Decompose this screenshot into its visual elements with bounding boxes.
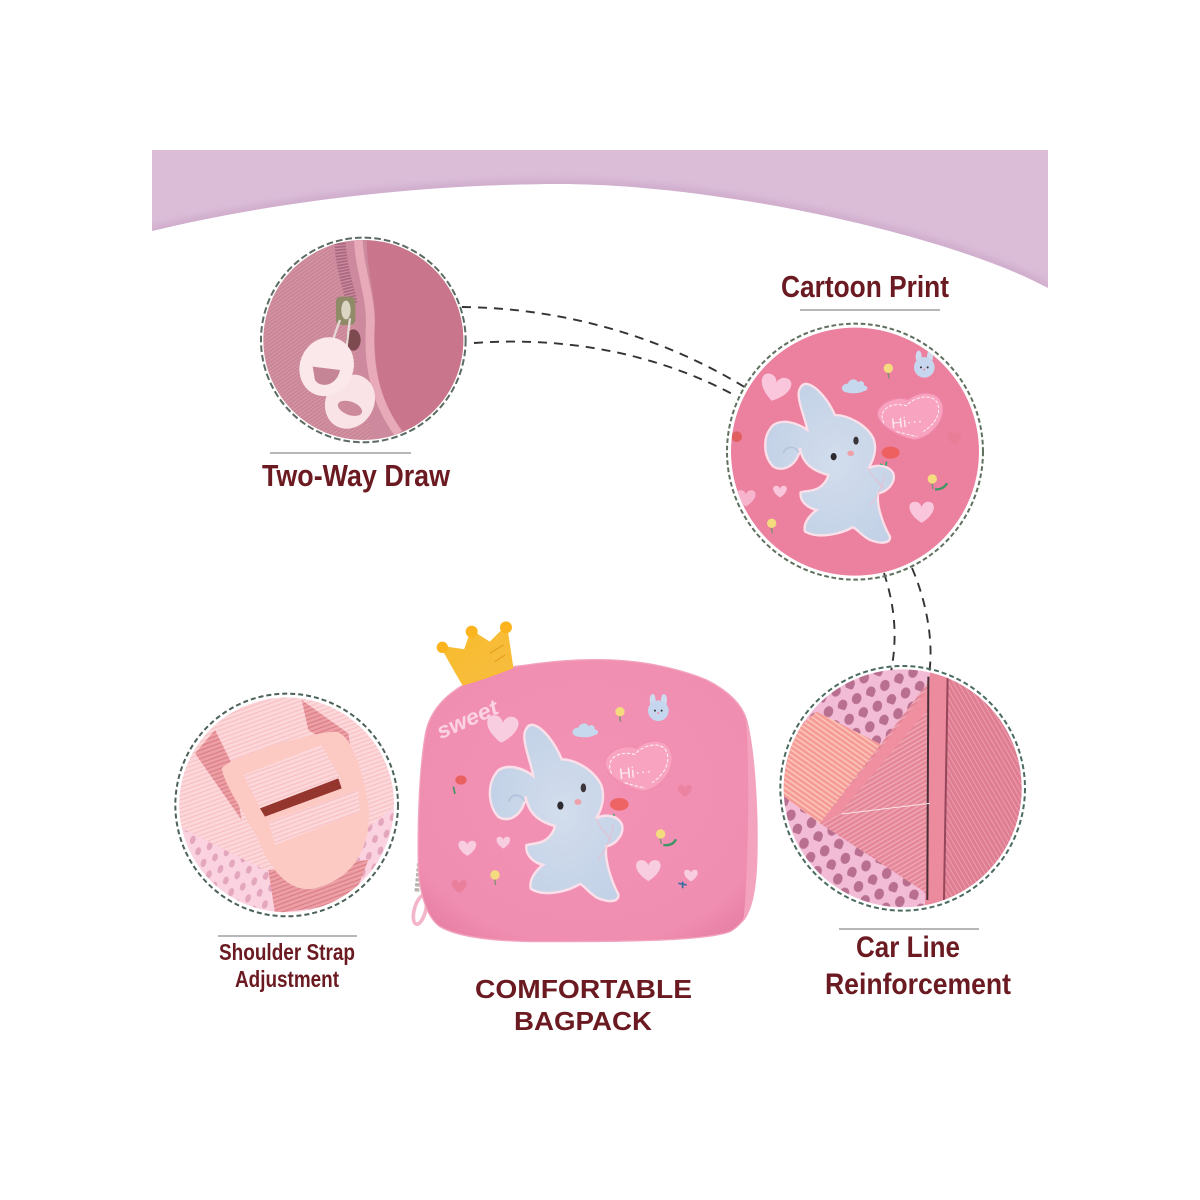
rule above shoulder strap (218, 935, 357, 937)
label: cartoon print: Cartoon Print (781, 269, 949, 304)
top lavender curved band (152, 150, 1048, 290)
rule above car line (839, 928, 979, 930)
detail circle: shoulder strap adjuster (175, 693, 402, 917)
hi heart: Hi··· (618, 763, 652, 783)
bag decorations (452, 694, 698, 893)
label: car line reinforcement: Reinforcement (825, 968, 1011, 1001)
dashed connector: cartoon print to car line (884, 568, 931, 674)
detail circle: car line reinforcement (780, 666, 1028, 913)
bag side panel (743, 718, 757, 922)
label: shoulder strap adjustment: Adjustment (235, 966, 339, 992)
bunny figure (490, 725, 622, 901)
rule above two-way draw (270, 452, 411, 454)
heading: comfortable bagpack (475, 974, 692, 1036)
label: car line reinforcement (825, 931, 1011, 1001)
product: pink bag (411, 621, 757, 942)
detail circle: cartoon print (727, 324, 983, 580)
dashed connector: zipper to cartoon print (462, 307, 746, 396)
label: shoulder strap adjustment: Shoulder Strap (219, 939, 355, 965)
bag body (418, 660, 757, 942)
heading: comfortable bagpack: COMFORTABLE (475, 974, 692, 1004)
sweet text: sweet (433, 694, 504, 744)
label: shoulder strap adjustment (219, 939, 355, 992)
zipper pull (411, 863, 429, 926)
hi text: Hi··· (890, 412, 923, 431)
rule below cartoon print (800, 309, 940, 311)
crown (437, 621, 512, 684)
heading: comfortable bagpack: BAGPACK (514, 1006, 652, 1036)
label: two-way draw: Two-Way Draw (262, 458, 451, 493)
hi heart (605, 741, 672, 791)
label: car line reinforcement: Car Line (856, 931, 960, 964)
detail circle: two-way zipper (257, 237, 470, 443)
